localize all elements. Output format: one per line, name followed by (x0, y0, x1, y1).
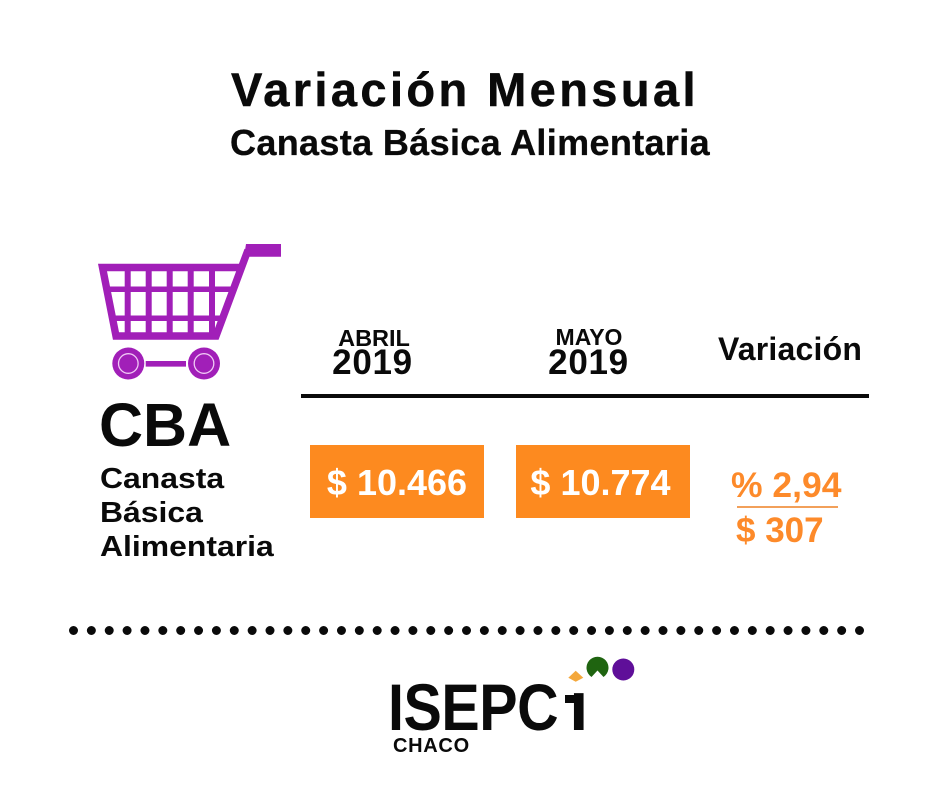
dotted divider (69, 626, 864, 635)
fraction line (737, 506, 838, 508)
variation percent: % 2,94 (731, 465, 842, 505)
CBA description: Básica (100, 497, 203, 529)
acronym CBA: CBA (99, 391, 231, 459)
logo symbols (568, 656, 634, 682)
value box: abril (310, 445, 484, 518)
value box: abril: $ 10.466 (327, 462, 467, 503)
column header: variación: Variación (718, 330, 862, 366)
logo final letter flag (565, 695, 575, 703)
table rule (301, 394, 869, 398)
CBA description: Alimentaria (100, 531, 274, 563)
logo final letter: ı (569, 667, 588, 745)
value box: mayo: $ 10.774 (530, 462, 671, 503)
logo: ISEPCI Chaco (388, 656, 634, 757)
CBA description (100, 463, 274, 563)
column header: mayo 2019 (548, 324, 629, 382)
value box: mayo (516, 445, 690, 518)
mayo label: MAYO (556, 324, 622, 350)
variation amount: $ 307 (736, 511, 824, 550)
column header: abril 2019 (332, 324, 413, 382)
abril year: 2019 (332, 342, 413, 382)
title: Variación Mensual (231, 62, 699, 116)
CBA description: Canasta (100, 463, 224, 495)
logo wordmark: ISEPC (388, 670, 558, 744)
subtitle: Canasta Básica Alimentaria (230, 122, 710, 163)
mayo year: 2019 (548, 342, 629, 382)
logo subtitle: CHACO (393, 735, 470, 757)
abril label: ABRIL (338, 324, 410, 350)
